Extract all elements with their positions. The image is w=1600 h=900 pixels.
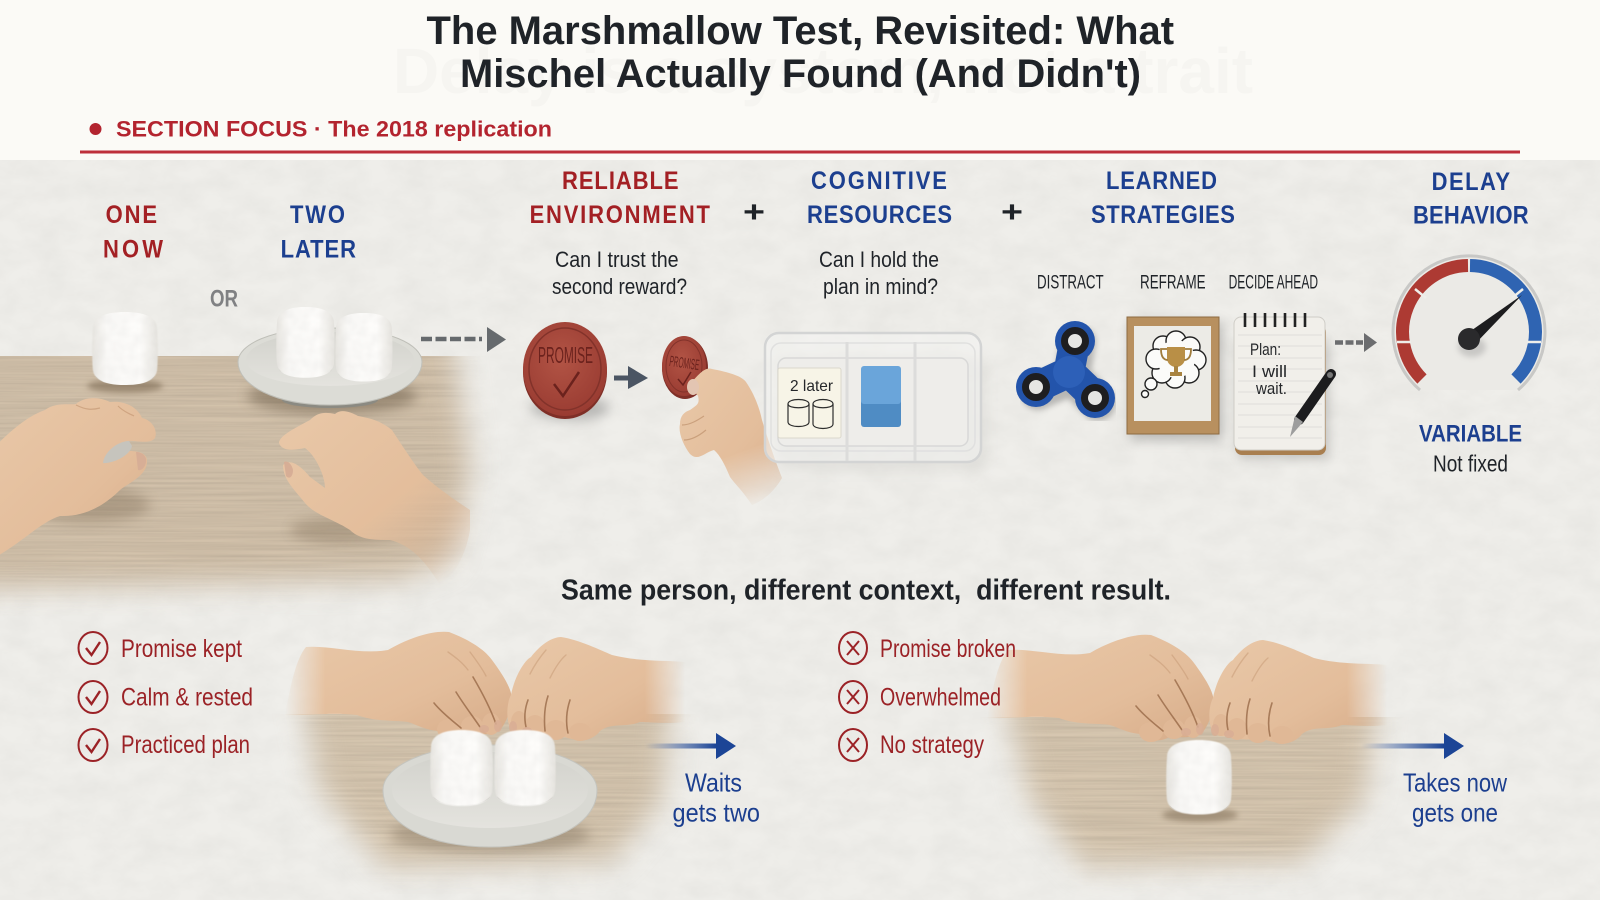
plus sign: + [743,196,765,229]
table [300,680,672,868]
header band [0,0,1600,160]
heading: RESOURCES [807,201,952,228]
question: Can I trust the [555,247,679,272]
icon: notepad and pen [1234,313,1333,458]
strategy labels: DISTRACT [1037,272,1104,294]
heading [807,167,952,228]
outcome: waits gets two: Waits [685,768,742,798]
arrow [645,733,736,759]
clear tray [765,333,987,471]
icon: notepad and pen: I will [1252,362,1287,381]
panel: cognitive resources [765,167,987,471]
left hand [0,398,156,560]
icon: framed thought [1127,317,1222,440]
item: promise broken [839,632,1016,664]
heading: BEHAVIOR [1413,201,1529,229]
item: promise kept [78,632,242,664]
hands [987,635,1387,744]
icon: trophy [1161,347,1191,376]
single marshmallow [1162,740,1238,822]
hands [285,632,685,741]
heading [1091,167,1235,228]
caption: variable: VARIABLE [1419,420,1522,448]
heading [530,167,711,228]
strategy labels: DECIDE AHEAD [1229,272,1318,294]
promise coin in hand [662,336,708,399]
ghost headline: Delay is a system, not a trait [393,35,1253,107]
heading: one now: ONE [106,201,157,228]
question [819,247,939,299]
gauge [1393,256,1545,390]
crosslist [839,632,1016,761]
item: no strategy: No strategy [880,731,984,759]
item: overwhelmed: Overwhelmed [880,684,1001,712]
checklist [78,632,253,761]
note card: 2 later [790,378,834,395]
heading: one now [103,201,164,263]
heading [1413,168,1529,229]
icon: notepad and pen: Plan: [1250,340,1281,359]
question [552,247,687,299]
arrow: dashed to reliable environment [421,327,506,352]
panel: delay behavior [1393,168,1545,476]
strategy labels: REFRAME [1140,272,1206,294]
table [1000,680,1380,868]
title [426,9,1174,96]
heading: COGNITIVE [811,167,947,194]
panel: learned strategies [1016,167,1333,458]
promise coin large: PROMISE [538,342,593,368]
plate with two marshmallows [238,307,422,414]
arrow [614,366,648,389]
note card [778,368,841,438]
heading: ENVIRONMENT [530,201,711,228]
hand holding coin [680,369,782,505]
heading: STRATEGIES [1091,201,1235,228]
heading: two later: LATER [281,235,356,263]
heading: DELAY [1432,168,1510,195]
panel: reliable environment [523,167,782,505]
question: Can I hold the [819,247,939,272]
item: calm and rested [78,681,253,713]
table top [0,320,470,590]
thought cloud [1142,331,1206,398]
icon: notepad and pen: wait. [1255,379,1287,398]
item: promise broken: Promise broken [880,635,1016,663]
or label: OR [210,286,238,312]
heading: RELIABLE [562,167,679,194]
outcome: waits gets two [672,768,760,828]
heading: LEARNED [1106,167,1217,194]
right hand [279,411,470,585]
question: plan in mind? [823,274,938,299]
section focus label: SECTION FOCUS · The 2018 replication [116,116,552,142]
strategy labels [1037,272,1318,294]
heading: two later [281,201,356,263]
panel: favorable context [78,632,760,868]
outcome: takes now gets one [1403,768,1507,828]
arrow: strategies to delay behavior [1335,333,1377,352]
icon: fidget spinner [1016,321,1115,418]
item: practiced plan [78,729,250,761]
item: overwhelmed [839,681,1001,713]
item: no strategy [839,729,984,761]
plus sign: + [1001,196,1023,229]
arrow [1361,733,1464,759]
single marshmallow [87,312,163,393]
question: second reward? [552,274,687,299]
promise coin large [523,322,610,420]
title: The Marshmallow Test, Revisited: What [426,9,1174,53]
heading: one now: NOW [103,235,164,263]
outcome: takes now gets one: Takes now [1403,768,1507,798]
title: Mischel Actually Found (And Didn't) [460,52,1141,96]
heading: two later: TWO [290,201,345,228]
panel: the choice [0,201,470,590]
plate with two marshmallows [383,730,597,853]
caption: not fixed: Not fixed [1433,450,1508,476]
subheading: Same person, different context, different result. [561,574,1171,606]
outcome: takes now gets one: gets one [1412,798,1498,828]
section rule [80,150,1520,154]
panel: unfavorable context [839,632,1507,868]
promise coin in hand: PROMISE [668,353,700,374]
outcome: waits gets two: gets two [672,798,760,828]
blue block [861,366,901,427]
item: practiced plan: Practiced plan [121,731,250,759]
item: promise kept: Promise kept [121,635,242,663]
item: calm and rested: Calm & rested [121,684,253,712]
